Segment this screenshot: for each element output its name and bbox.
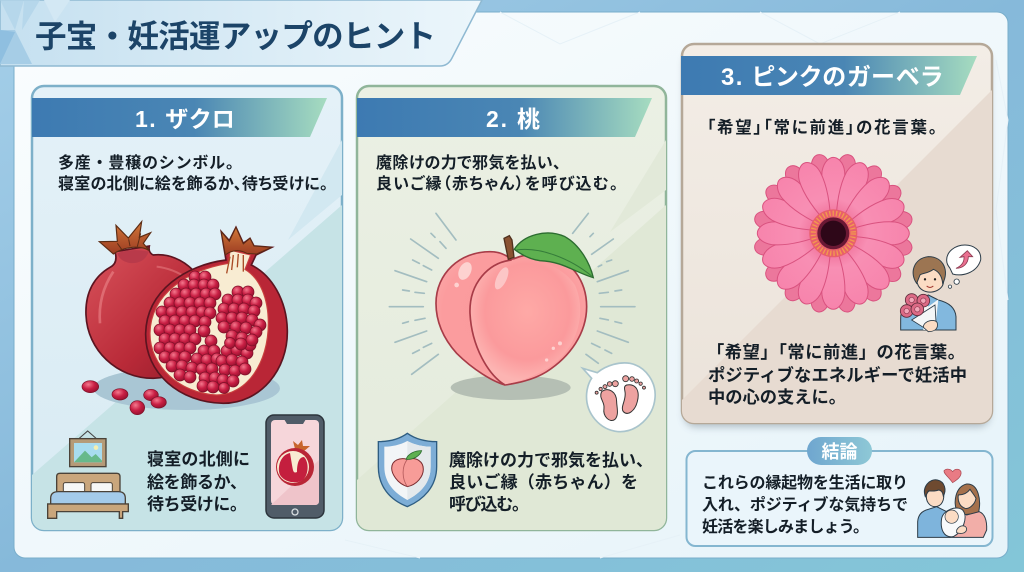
whole fruit (86, 246, 210, 378)
icon: man with bouquet (900, 245, 981, 332)
pill: 結論: 結論 (822, 442, 858, 462)
text block: 1 description: 寝室の北側に絵を飾るか、待ち受けに。 (58, 174, 328, 193)
text block: protection tip: 魔除けの力で邪気を払い、 (449, 451, 653, 470)
text block: bedroom tip: 待ち受けに。 (147, 495, 247, 514)
title: 子宝・妊活運アップのヒント (35, 18, 436, 54)
heading: 3. ピンクのガーベラ: 3. ピンクのガーベラ (721, 64, 943, 91)
cut half (146, 227, 287, 403)
heading: 2. 桃: 2. 桃 (486, 106, 540, 132)
text block: conclusion: 妊活を楽しみましょう。 (702, 517, 869, 536)
text block: 3 description: 「希望」「常に前進」の花言葉。 (707, 117, 937, 137)
text block: conclusion: これらの縁起物を生活に取り (702, 474, 908, 492)
text block: bedroom tip: 絵を飾るか、 (147, 473, 247, 492)
heading: 1. ザクロ: 1. ザクロ (135, 106, 235, 132)
text block: conclusion: 入れ、ポジティブな気持ちで (702, 495, 908, 514)
text block: 3 detail: 「希望」「常に前進」の花言葉。 (707, 342, 965, 362)
panel: 結論 (686, 437, 992, 546)
illustration: pomegranate (82, 222, 287, 415)
panel: 1 ザクロ (32, 86, 342, 530)
illustration: gerbera (753, 153, 914, 314)
text block: 3 detail: ポジティブなエネルギーで妊活中 (708, 365, 967, 385)
text block: 3 detail: 中の心の支えに。 (708, 387, 846, 407)
icon: shield with peach (378, 433, 437, 507)
heading: 1. ザクロ (32, 98, 327, 137)
seeds (154, 271, 266, 394)
illustration: peach (378, 213, 655, 507)
icon: bed and picture (48, 431, 128, 518)
panel: 2 桃 (357, 86, 666, 530)
text block: 1 description: 多産・豊穣のシンボル。 (58, 153, 242, 172)
text block: protection tip: 呼び込む。 (449, 495, 529, 514)
loose seeds (82, 381, 166, 415)
icon: phone (266, 415, 324, 518)
panel: 3 ピンクのガーベラ (681, 44, 992, 427)
heading: 3. ピンクのガーベラ (681, 56, 977, 95)
text block: protection tip: 良いご縁（赤ちゃん）を (449, 472, 638, 492)
text block: bedroom tip: 寝室の北側に (147, 450, 250, 469)
text block: 2 description: 魔除けの力で邪気を払い、 (376, 153, 561, 172)
heading: 2. 桃 (357, 98, 652, 137)
icon: family (918, 469, 987, 537)
icon: speech bubble with footprints (583, 363, 655, 432)
title banner (0, 0, 482, 66)
pill: 結論 (807, 437, 872, 465)
text block: 2 description: 良いご縁（赤ちゃん）を呼び込む。 (376, 174, 618, 193)
